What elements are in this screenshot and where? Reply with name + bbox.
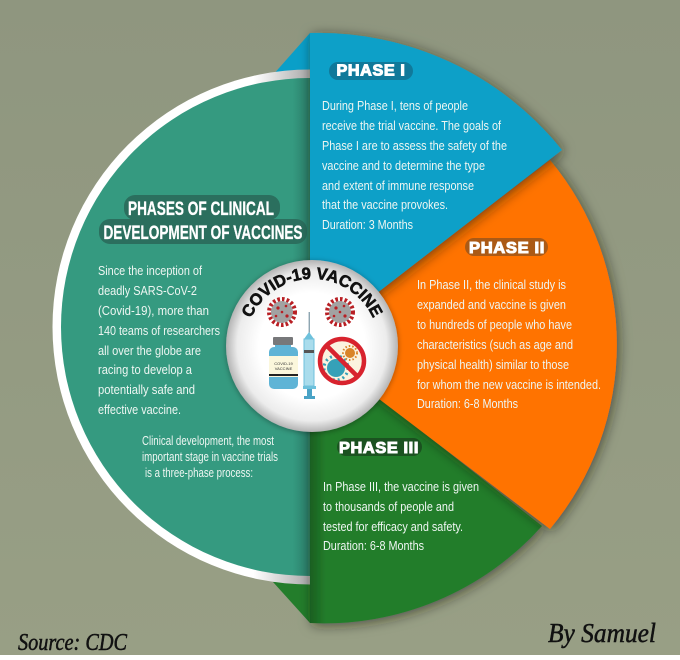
author credit: By Samuel [548, 618, 656, 648]
phase I label: PHASE I [336, 62, 406, 80]
green fold tab [273, 582, 310, 623]
intro text [98, 263, 220, 417]
process note: important stage in vaccine trials [142, 450, 278, 464]
phase II text: characteristics (such as age and [417, 337, 573, 352]
phase I text: Duration: 3 Months [322, 217, 413, 232]
phase III text: to thousands of people and [323, 499, 454, 514]
intro text: 140 teams of researchers [98, 323, 220, 338]
process note [142, 434, 278, 480]
orange sector [308, 160, 617, 529]
intro text: all over the globe are [98, 343, 201, 358]
phase III text: In Phase III, the vaccine is given [323, 479, 479, 494]
curved title: COVID-19 VACCINE [242, 267, 384, 318]
phase II text: In Phase II, the clinical study is [417, 277, 566, 292]
icon: vaccine vial: COVID-19 [274, 361, 293, 366]
panel: phase I [310, 33, 562, 345]
icon: virus right [328, 300, 352, 324]
phase I text: Phase I are to assess the safety of the [322, 138, 507, 153]
intro text: racing to develop a [98, 362, 193, 377]
phase II text: to hundreds of people who have [417, 317, 572, 332]
phase III text [323, 479, 479, 553]
icon: syringe [303, 312, 316, 399]
icon: no virus sign [320, 339, 364, 383]
intro text: deadly SARS-CoV-2 [98, 283, 197, 298]
phase I text: vaccine and to determine the type [322, 158, 485, 173]
panel: phase III [310, 343, 542, 623]
phase II text: for whom the new vaccine is intended. [417, 377, 601, 392]
process note: is a three-phase process: [145, 466, 253, 480]
heading: DEVELOPMENT OF VACCINES [104, 223, 302, 244]
teal half circle [61, 78, 310, 576]
heading [104, 199, 302, 244]
icon: vaccine vial [269, 337, 298, 389]
green sector [310, 343, 542, 623]
phase I pill [329, 62, 413, 80]
phase III text: tested for efficacy and safety. [323, 519, 463, 534]
phase I text: During Phase I, tens of people [322, 98, 468, 113]
icon: vaccine vial: VACCINE [275, 366, 293, 371]
heading: PHASES OF CLINICAL [128, 199, 274, 220]
blue fold tab [272, 33, 310, 76]
white sphere [226, 260, 398, 432]
white ring [53, 70, 310, 584]
phase I text: receive the trial vaccine. The goals of [322, 118, 501, 133]
intro text: (Covid-19), more than [98, 303, 209, 318]
process note: Clinical development, the most [142, 434, 274, 448]
phase II pill [465, 238, 548, 256]
phase II label: PHASE II [469, 240, 545, 257]
intro text: potentially safe and [98, 382, 195, 397]
source credit: Source: CDC [18, 630, 128, 656]
phase I text [322, 98, 507, 232]
phase III pill [337, 438, 422, 456]
intro text: effective vaccine. [98, 402, 181, 417]
phase I text: that the vaccine provokes. [322, 197, 448, 212]
blue sector [310, 33, 562, 345]
phase II text: expanded and vaccine is given [417, 297, 566, 312]
center badge [224, 258, 402, 435]
icon: virus left [270, 300, 294, 324]
heading pill line 2 [99, 219, 307, 244]
heading pill line 1 [124, 195, 280, 220]
phase II text: physical health) similar to those [417, 357, 569, 372]
panel: intro [53, 70, 310, 584]
phase III label: PHASE III [339, 440, 419, 457]
phase II text [417, 277, 601, 411]
phase II text: Duration: 6-8 Months [417, 396, 518, 411]
intro text: Since the inception of [98, 263, 202, 278]
phase I text: and extent of immune response [322, 178, 474, 193]
phase III text: Duration: 6-8 Months [323, 538, 424, 553]
panel: phase II [308, 160, 617, 529]
